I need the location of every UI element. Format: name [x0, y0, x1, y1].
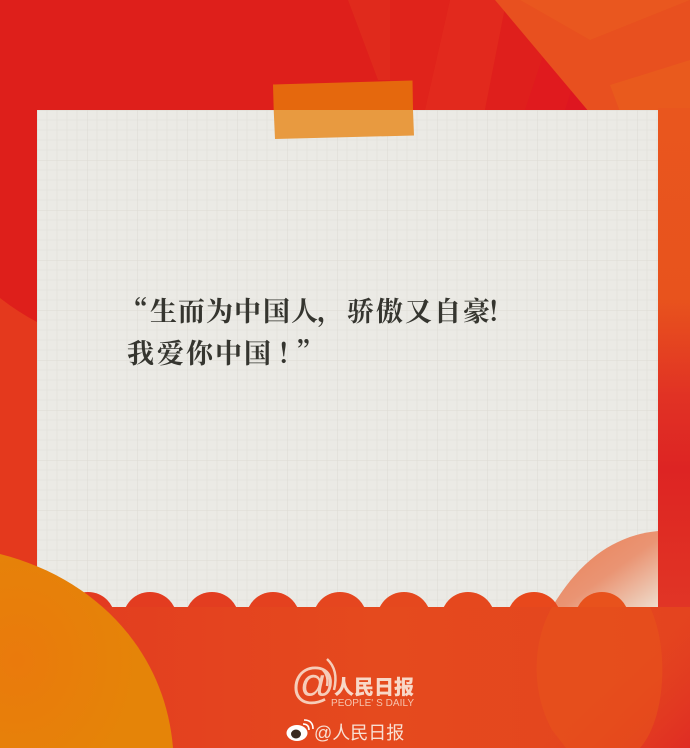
- icon: weibo: [286, 720, 313, 741]
- quote line 2: 我爱你中国！”: [127, 332, 323, 371]
- logo at symbol: @: [291, 659, 336, 708]
- quote line 1: “生而为中国人，骄傲又自豪！: [121, 290, 514, 329]
- soft circle lower right: [537, 607, 662, 748]
- orange quarter circle: [0, 554, 173, 748]
- logo signal arcs: [323, 659, 335, 690]
- bottom band: [0, 607, 690, 748]
- logo: People's Daily: [291, 659, 414, 709]
- faded quarter circle on paper: [552, 531, 658, 607]
- logo english: PEOPLE' S DAILY: [331, 698, 414, 709]
- right side of bottom band: [540, 607, 690, 748]
- logo name: 人民日报: [334, 671, 414, 700]
- panel: grid paper: [37, 110, 658, 607]
- scalloped paper edge: [84, 592, 626, 607]
- watermark handle: @人民日报: [314, 723, 404, 743]
- tape: [273, 80, 414, 139]
